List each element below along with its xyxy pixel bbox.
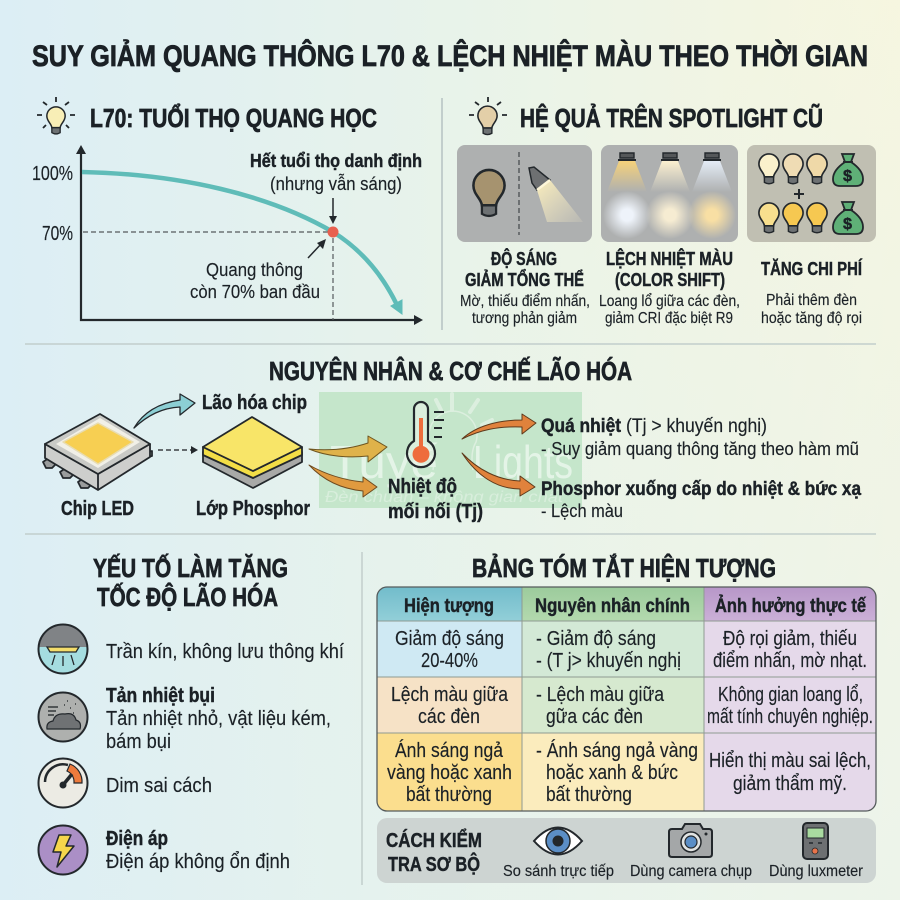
table row: color shift: gữa các đèn <box>546 706 643 728</box>
heading: aging accelerators: TỐC ĐỘ LÃO HÓA <box>97 582 278 612</box>
icon: dim bulb <box>469 97 507 135</box>
table row: brightness: điểm nhấn, mờ nhạt. <box>713 650 867 672</box>
table row: abnormal tint: bất thường <box>406 784 492 806</box>
icon: thermometer <box>407 402 444 467</box>
text: dusty heatsink: Tản nhiệt bụi <box>106 685 215 707</box>
text: phosphor degradation: Phosphor xuống cấp do nhiệt & bức xạ <box>541 478 861 500</box>
text: dusty heatsink <box>106 685 331 753</box>
table row: abnormal tint: Ánh sáng ngả <box>395 739 504 762</box>
table header <box>404 595 866 617</box>
panel: causes and aging mechanism <box>43 356 861 523</box>
label: chip aging: Lão hóa chip <box>202 392 307 414</box>
label: compare: So sánh trực tiếp <box>503 863 614 880</box>
label: cost <box>761 258 863 327</box>
table row: brightness <box>395 628 867 672</box>
label: quick check title <box>386 829 482 876</box>
icon: LED chip <box>43 414 152 490</box>
watermark: Đèn chuẩn – không gian chất <box>325 488 564 506</box>
label: color shift: (COLOR SHIFT) <box>615 270 725 290</box>
label: brightness <box>460 248 590 327</box>
panel: summary table <box>377 553 876 883</box>
watermark: Lights <box>473 436 573 488</box>
arrow: chip to phosphor <box>158 446 198 454</box>
label: cost: TĂNG CHI PHÍ <box>761 258 863 279</box>
label: luxmeter: Dùng luxmeter <box>769 863 864 880</box>
label: cost: Phải thêm đèn <box>766 292 857 309</box>
line chart: lumen depreciation <box>32 145 423 325</box>
text: dusty heatsink: bám bụi <box>106 731 171 753</box>
table row: abnormal tint: giảm thẩm mỹ. <box>733 773 847 795</box>
label: camera: Dùng camera chụp <box>630 863 752 880</box>
label: color shift: Loang lổ giữa các đèn, <box>599 292 740 310</box>
table row: brightness: - Giảm độ sáng <box>536 628 656 650</box>
text: voltage <box>106 828 290 873</box>
icon: luxmeter <box>803 823 828 859</box>
watermark: Tuyế <box>330 436 438 488</box>
table row: brightness: 20-40% <box>421 650 478 672</box>
text: closed ceiling: Trần kín, không lưu thông khí <box>106 641 344 663</box>
icon: dusty heatsink <box>38 692 88 742</box>
panel: L70 optical lifetime <box>32 97 423 325</box>
table header: Ảnh hưởng thực tế <box>715 595 866 617</box>
label: phosphor: Lớp Phosphor <box>196 498 310 520</box>
text: overheating <box>541 416 859 459</box>
line chart: lumen depreciation: 70% <box>42 223 73 245</box>
table row: abnormal tint: Hiển thị màu sai lệch, <box>709 750 871 772</box>
panel: quick checks <box>377 818 876 883</box>
card: color shift <box>599 145 740 327</box>
arrow: chip aging <box>134 394 195 428</box>
callout: 70% remaining <box>190 239 326 302</box>
callout: 70% remaining: còn 70% ban đầu <box>190 281 320 302</box>
label: brightness: Mờ, thiếu điểm nhấn, <box>460 292 590 310</box>
arrow: phosphor degradation <box>462 453 535 496</box>
label: brightness: ĐỘ SÁNG <box>491 248 557 269</box>
heading: summary table: BẢNG TÓM TẮT HIỆN TƯỢNG <box>472 553 776 583</box>
card: increased cost: $ <box>843 216 852 233</box>
text: voltage: Điện áp <box>106 828 168 850</box>
label: color shift: LỆCH NHIỆT MÀU <box>606 248 733 269</box>
label: junction temperature: mối nối (Tj) <box>388 501 483 523</box>
icon: light bulb <box>37 97 75 134</box>
label: color shift <box>599 248 740 327</box>
label: junction temperature <box>388 476 483 523</box>
text: phosphor degradation <box>541 478 861 521</box>
table row: abnormal tint: hoặc xanh & bức <box>546 762 678 784</box>
panel: consequences on old spotlights <box>457 97 876 327</box>
text: dimming: Dim sai cách <box>106 775 212 797</box>
watermark <box>319 392 582 508</box>
table row: color shift: Lệch màu giữa <box>391 684 509 706</box>
label: quick check title: TRA SƠ BỘ <box>388 852 480 876</box>
table row: color shift <box>391 684 873 728</box>
table row: abnormal tint: vàng hoặc xanh <box>387 762 512 784</box>
arrow: phosphor to junction label <box>309 465 377 497</box>
label: brightness: tương phản giảm <box>472 310 577 327</box>
table row: color shift: - Lệch màu giữa <box>536 684 665 706</box>
heading: aging accelerators: YẾU TỐ LÀM TĂNG <box>93 553 288 583</box>
arrow: phosphor to junction temperature <box>309 436 387 462</box>
heading: consequences: HỆ QUẢ TRÊN SPOTLIGHT CŨ <box>520 103 823 133</box>
text: overheating: Quá nhiệt <box>541 416 622 437</box>
table header: Hiện tượng <box>404 596 494 617</box>
callout: end of rated life: (nhưng vẫn sáng) <box>270 173 402 194</box>
card: increased cost <box>747 145 876 327</box>
text: voltage: Điện áp không ổn định <box>106 851 290 873</box>
table row: brightness: Giảm độ sáng <box>395 628 504 650</box>
text: dusty heatsink: Tản nhiệt nhỏ, vật liệu kém, <box>106 708 331 730</box>
table header: Nguyên nhân chính <box>535 596 690 617</box>
table row: brightness: Độ rọi giảm, thiếu <box>723 628 857 650</box>
table: summary <box>377 587 876 811</box>
text: overheating: (Tj > khuyến nghị) <box>626 416 767 437</box>
icon: camera <box>669 824 712 857</box>
table row: color shift: Không gian loang lổ, <box>718 684 863 706</box>
callout: end of rated life: Hết tuổi thọ danh định <box>250 151 422 171</box>
icon: closed ceiling <box>38 624 88 674</box>
arrow: overheating <box>462 414 536 439</box>
label: cost: hoặc tăng độ rọi <box>761 310 862 327</box>
heading: L70: L70: TUỔI THỌ QUANG HỌC <box>90 103 377 133</box>
icon: voltage bolt <box>38 826 88 874</box>
table row: abnormal tint: - Ánh sáng ngả vàng <box>536 739 698 762</box>
icon: dimmer gauge <box>38 758 88 808</box>
panel: aging accelerators <box>38 553 344 874</box>
table row: abnormal tint <box>387 739 871 806</box>
text: phosphor degradation: - Lệch màu <box>541 500 623 521</box>
text: overheating: - Suy giảm quang thông tăng theo hàm mũ <box>541 438 859 459</box>
icon: phosphor layer <box>203 417 302 488</box>
table row: abnormal tint: bất thường <box>546 784 632 806</box>
icon: eye <box>534 828 582 854</box>
label: junction temperature: Nhiệt độ <box>388 476 457 498</box>
callout: 70% remaining: Quang thông <box>206 259 303 280</box>
label: quick check title: CÁCH KIỂM <box>386 829 482 852</box>
label: color shift: giảm CRI đặc biệt R9 <box>605 310 733 327</box>
card: increased cost: $ <box>843 168 852 185</box>
card: reduced brightness <box>457 145 592 327</box>
callout: end of rated life <box>250 151 422 224</box>
line chart: lumen depreciation: 100% <box>32 163 73 185</box>
label: Chip LED: Chip LED <box>61 498 134 520</box>
heading: aging accelerators <box>93 553 288 612</box>
heading: causes: NGUYÊN NHÂN & CƠ CHẾ LÃO HÓA <box>269 356 632 386</box>
table row: color shift: các đèn <box>418 706 480 728</box>
table row: brightness: - (T j> khuyến nghị <box>536 650 681 672</box>
label: brightness: GIẢM TỔNG THỂ <box>465 269 584 290</box>
